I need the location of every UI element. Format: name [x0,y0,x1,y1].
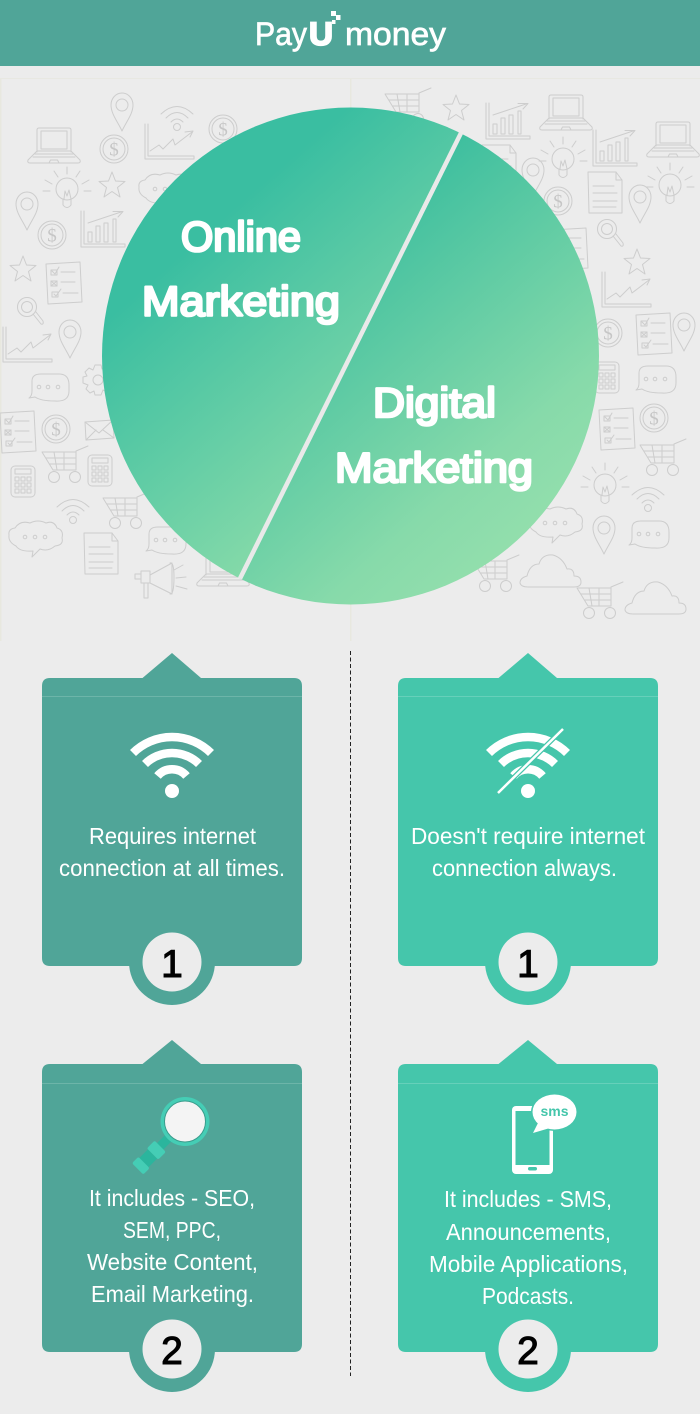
panel: digital 1 [398,653,658,1005]
background doodle pattern: $ [218,120,228,140]
heading: online marketing: Marketing [142,278,340,324]
text: includes sms announcements: Mobile Applications, [429,1251,628,1277]
text: includes sms announcements: Announcements, [446,1219,611,1245]
text: includes sms announcements [429,1186,628,1309]
logo: PayUmoney: U [309,16,333,52]
text: requires internet [59,823,285,881]
centre dashed divider [350,651,352,1376]
number badge 2 [498,1320,558,1378]
number badge 1 [142,932,202,992]
background doodle pattern [0,78,700,641]
text: does not require internet: Doesn't require internet [411,823,646,849]
text: includes sms announcements: It includes - SMS, [444,1186,612,1212]
number badge 2 [142,1320,202,1378]
text: requires internet: Requires internet [89,823,257,849]
split circle: online vs digital marketing [102,108,599,604]
heading: digital marketing [335,379,533,491]
text: does not require internet [411,823,646,881]
heading: digital marketing: Marketing [335,444,533,491]
background doodle pattern: $ [51,420,61,440]
header bar [0,0,700,66]
icon: phone with sms bubble: sms [540,1103,569,1119]
number badge 1: 1 [161,943,183,986]
text: includes seo sem ppc: It includes - SEO, [89,1185,255,1211]
icon: wifi [133,737,211,798]
text: includes seo sem ppc: Website Content, [87,1249,258,1275]
logo: PayUmoney: Pay [255,16,307,52]
background doodle pattern: $ [109,140,119,160]
logo: PayUmoney: money [345,16,446,52]
text: includes seo sem ppc [87,1185,258,1307]
text: includes sms announcements: Podcasts. [482,1283,574,1309]
background doodle pattern: $ [649,408,659,430]
background doodle pattern: $ [47,226,57,246]
background doodle pattern: $ [603,324,613,344]
panel: digital 2 [398,1040,658,1392]
number badge 1 [498,932,558,992]
text: does not require internet: connection always. [432,855,617,881]
panel: online 1 [42,653,302,1005]
heading: digital marketing: Digital [373,379,496,426]
icon: wifi crossed out [489,729,567,798]
logo: PayUmoney [255,11,446,52]
number badge 2: 2 [517,1330,539,1373]
heading: online marketing [142,213,340,324]
number badge 2: 2 [161,1330,183,1373]
background doodle pattern: $ [553,192,563,212]
icon: magnifier [120,1087,220,1186]
text: includes seo sem ppc: SEM, PPC, [123,1217,221,1243]
number badge 1: 1 [517,943,539,986]
text: includes seo sem ppc: Email Marketing. [91,1281,254,1307]
text: requires internet: connection at all times. [59,855,285,881]
panel: online 2 [42,1040,302,1392]
heading: online marketing: Online [181,213,301,260]
icon: phone with sms bubble [512,1093,578,1174]
